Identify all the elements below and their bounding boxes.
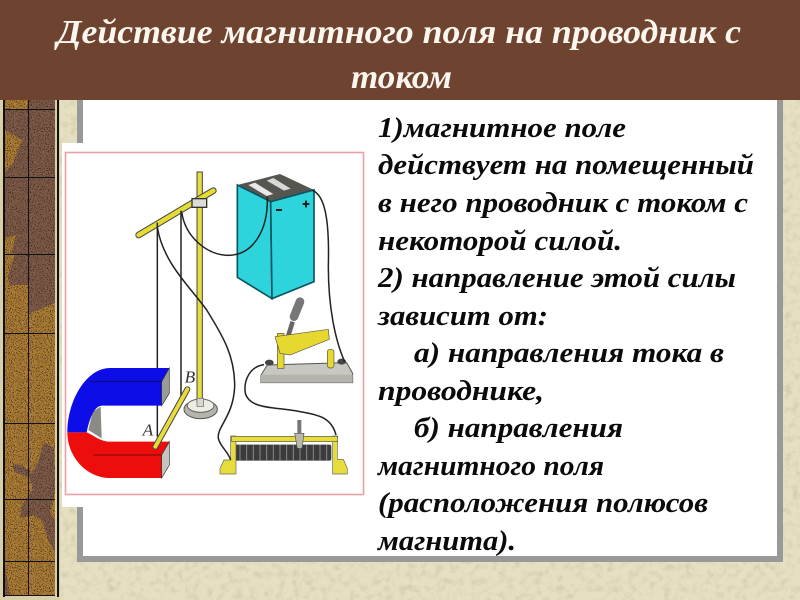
explanatory text: (расположения полюсов	[378, 487, 708, 519]
explanatory text: а) направления тока в	[414, 337, 724, 369]
icon: suspended conductor threads	[157, 211, 181, 437]
label: A: A	[142, 421, 154, 440]
explanatory text: действует на помещенный	[378, 149, 754, 181]
explanatory text: магнитного поля	[377, 450, 604, 482]
explanatory text: проводнике,	[378, 375, 544, 407]
explanatory text: некоторой силой.	[378, 225, 622, 257]
explanatory text	[377, 112, 754, 557]
panel shadow	[77, 100, 783, 562]
icon: conductor rod AB	[155, 389, 187, 447]
explanatory text: 1)магнитное поле	[378, 112, 626, 144]
icon: stand with crossbar	[139, 172, 217, 419]
explanatory text: магнита).	[377, 525, 516, 557]
explanatory text: зависит от:	[377, 300, 548, 332]
title: током	[351, 59, 452, 96]
explanatory text: б) направления	[414, 412, 623, 444]
icon: horseshoe magnet	[67, 368, 169, 478]
icon: rheostat	[220, 420, 347, 474]
decorative left strip	[0, 100, 60, 600]
icon: connecting wires	[157, 190, 345, 460]
illustration: experimental setup	[62, 143, 367, 507]
icon: battery	[237, 174, 314, 299]
icon: knife switch	[261, 302, 353, 383]
white content panel	[83, 100, 777, 556]
explanatory text: 2) направление этой силы	[377, 262, 736, 294]
label: B: B	[185, 367, 196, 386]
explanatory text: в него проводник с током с	[378, 187, 748, 219]
title banner	[0, 0, 800, 100]
title: Действие магнитного поля на проводник с	[54, 14, 741, 51]
title	[54, 14, 741, 96]
